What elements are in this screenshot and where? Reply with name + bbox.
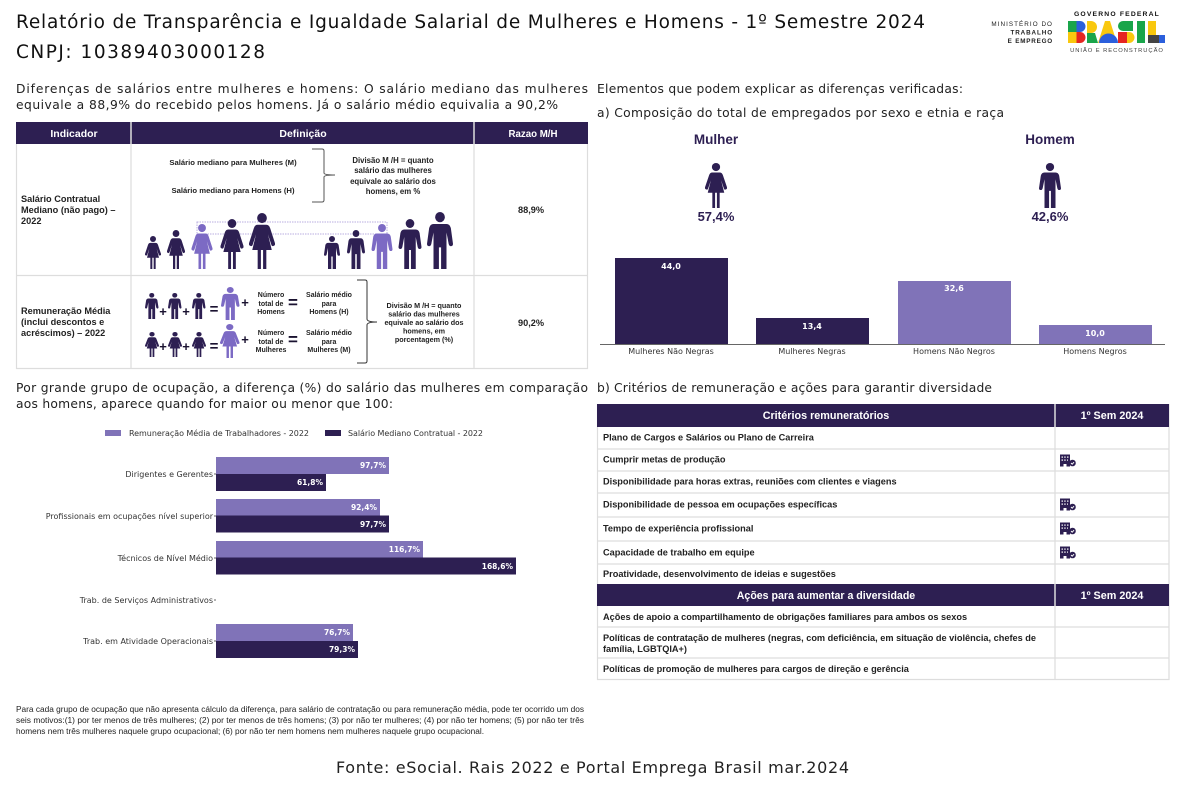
header: ações para aumentar a diversidade — [597, 584, 1169, 606]
title: CNPJ: 10389403000128 — [16, 42, 265, 63]
icons: building check — [1060, 454, 1076, 558]
row: salário contratual mediano: homens, em % — [366, 187, 420, 196]
row: remuneração média — [21, 280, 544, 363]
category labels: Trab. de Serviços Administrativos — [79, 596, 213, 605]
panel: homem: 42,6% — [1032, 209, 1069, 224]
formula: mulheres: = — [288, 330, 298, 349]
icons: people scale — [145, 212, 453, 269]
panel: critérios table — [597, 404, 1169, 680]
chart: composição bars: 32,6 — [944, 284, 964, 293]
heading: composição do total de empregados: a) Composição do total de empregados por sexo e etnia e raça — [597, 106, 1004, 120]
panel: mulher: Mulher — [694, 132, 739, 147]
text: por grande grupo de ocupação: Por grande grupo de ocupação, a diferença (%) do salário das mulheres em comparação — [16, 381, 588, 395]
row: remuneração média: homens, em — [403, 326, 445, 336]
footnote — [16, 704, 585, 736]
formula: homens: = — [210, 301, 219, 318]
category labels: Trab. em Atividade Operacionais — [82, 637, 213, 646]
value labels — [297, 461, 513, 654]
row: salário contratual mediano: salário das mulheres — [354, 166, 432, 175]
legend: Salário Mediano Contratual - 2022 — [348, 429, 483, 438]
formula: mulheres: para — [322, 339, 336, 346]
text: por grande grupo de ocupação — [16, 381, 588, 411]
panel: indicator table — [16, 122, 588, 368]
rows: ações: família, LGBTQIA+) — [603, 644, 687, 654]
legend: Remuneração Média de Trabalhadores - 2022 — [129, 428, 309, 438]
text: elementos que podem explicar: Elementos que podem explicar as diferenças verificadas: — [597, 82, 963, 96]
footnote: seis motivos:(1) por ter menos de três mulheres; (2) por ter menos de três homens; (3) por não ter mulheres; (4) por não ter homens; (5) por não ter três — [16, 715, 585, 725]
logo: governo federal brasil: GOVERNO FEDERAL — [1074, 11, 1160, 18]
rows: critérios: Tempo de experiência profissional — [603, 524, 753, 534]
source line: Fonte: eSocial. Rais 2022 e Portal Emprega Brasil mar.2024 — [336, 758, 849, 777]
rows: critérios: Cumprir metas de produção — [603, 454, 726, 464]
title — [16, 12, 925, 63]
row: remuneração média: Divisão M /H = quanto — [387, 301, 462, 310]
legend — [105, 428, 483, 438]
bars — [216, 457, 516, 658]
formula: mulheres: + — [241, 332, 249, 347]
logo: ministério do trabalho e emprego: E EMPREGO — [1008, 38, 1053, 45]
chart: composição bars: 10,0 — [1085, 329, 1105, 338]
row: salário contratual mediano: Salário mediano para Homens (H) — [171, 186, 295, 195]
row: salário contratual mediano: Salário mediano para Mulheres (M) — [169, 158, 297, 167]
formula: mulheres: Mulheres (M) — [307, 347, 351, 354]
value labels: 79,3% — [329, 645, 355, 654]
panel: homem: Homem — [1025, 132, 1075, 147]
logo: ministério do trabalho e emprego: TRABALHO — [1010, 30, 1053, 36]
formula: mulheres: Número — [258, 330, 284, 337]
row: remuneração média: salário das mulheres — [388, 310, 460, 318]
category labels: Dirigentes e Gerentes — [125, 470, 213, 479]
heading: critérios de remuneração: b) Critérios de remuneração e ações para garantir diversidade — [597, 381, 992, 395]
chart: composição bars: 44,0 — [661, 262, 681, 271]
formula: homens: total de — [259, 301, 284, 308]
header: critérios remuneratórios: Critérios remuneratórios — [763, 410, 889, 422]
text: diferenças de salários — [16, 82, 588, 112]
logo: ministério do trabalho e emprego — [991, 19, 1053, 45]
header: ações para aumentar a diversidade: Ações para aumentar a diversidade — [737, 590, 915, 602]
formula: homens: + — [241, 295, 249, 310]
formula: mulheres: Mulheres — [256, 347, 286, 354]
chart: composição bars — [600, 258, 1165, 356]
table header: Definição — [279, 128, 327, 140]
formula: homens: + — [159, 304, 167, 319]
chart: occupational groups horizontal bars — [46, 428, 516, 658]
logo: ministério do trabalho e emprego: MINISTÉRIO DO — [991, 19, 1053, 28]
header: critérios remuneratórios — [597, 404, 1169, 427]
text: diferenças de salários: equivale a 88,9% do recebido pelos homens. Já o salário médio equivalia a 90,2% — [16, 98, 558, 112]
formula: homens: Homens (H) — [309, 309, 349, 316]
value labels: 116,7% — [389, 545, 420, 554]
formula: homens — [145, 287, 352, 320]
chart: composição bars: Homens Negros — [1063, 347, 1127, 356]
row: remuneração média: (inclui descontos e — [21, 317, 104, 327]
header: ações para aumentar a diversidade: 1º Sem 2024 — [1081, 590, 1143, 602]
formula: homens: = — [288, 293, 298, 312]
table header: Indicador — [50, 128, 98, 140]
formula: mulheres — [145, 324, 352, 358]
row: remuneração média: Remuneração Média — [21, 306, 111, 316]
panel: homem — [1025, 132, 1075, 224]
rows: critérios — [603, 432, 897, 579]
formula: homens: + — [182, 304, 190, 319]
rows: critérios: Capacidade de trabalho em equipe — [603, 548, 755, 558]
row: remuneração média: equivale ao salário dos — [384, 318, 464, 327]
row: remuneração média: acréscimos) – 2022 — [21, 328, 105, 338]
footnote: homens nem três mulheres naquele grupo ocupacional; (6) por não ter nem homens nem mulheres naquele grupo ocupacional. — [16, 726, 484, 736]
header: critérios remuneratórios: 1º Sem 2024 — [1081, 410, 1143, 422]
text: diferenças de salários: Diferenças de salários entre mulheres e homens: O salário mediano das mulheres — [16, 82, 588, 96]
formula: homens: Número — [258, 292, 284, 299]
table header: Razao M/H — [508, 129, 558, 140]
row: salário contratual mediano: 88,9% — [518, 205, 544, 215]
logo: governo federal brasil — [1068, 11, 1165, 54]
chart: composição bars: Mulheres Não Negras — [628, 347, 714, 356]
formula: homens: Salário médio — [306, 292, 352, 299]
chart: composição bars: 13,4 — [802, 322, 822, 331]
chart: composição bars: Mulheres Negras — [778, 347, 846, 356]
row: remuneração média: 90,2% — [518, 318, 544, 328]
formula: mulheres: + — [159, 339, 167, 354]
row: salário contratual mediano: Mediano (não pago) – — [21, 205, 115, 215]
rows: ações: Ações de apoio a compartilhamento de obrigações familiares para ambos os sexos — [603, 612, 967, 622]
row: salário contratual mediano — [21, 149, 544, 226]
value labels: 92,4% — [351, 503, 377, 512]
footnote: Para cada grupo de ocupação que não apresenta cálculo da diferença, para salário de contratação ou para remuneração média, pode ter ocorrido um dos — [16, 704, 585, 714]
rows: ações: Políticas de contratação de mulheres (negras, com deficiência, em situação de violência, chefes de — [603, 633, 1036, 643]
row: salário contratual mediano: 2022 — [21, 216, 41, 226]
rows: critérios: Proatividade, desenvolvimento de ideias e sugestões — [603, 569, 836, 579]
rows: ações — [603, 612, 1036, 674]
text: por grande grupo de ocupação: aos homens, aparece quando for maior ou menor que 100: — [16, 397, 393, 411]
value labels: 168,6% — [482, 562, 513, 571]
category labels — [46, 470, 214, 646]
row: salário contratual mediano: Salário Contratual — [21, 194, 100, 204]
formula: mulheres: total de — [259, 339, 284, 346]
formula: mulheres: + — [182, 339, 190, 354]
row: salário contratual mediano: Divisão M /H = quanto — [352, 156, 434, 165]
rows: ações: Políticas de promoção de mulheres para cargos de direção e gerência — [603, 664, 910, 674]
row: remuneração média: porcentagem (%) — [395, 335, 454, 344]
category labels: Técnicos de Nível Médio — [117, 553, 213, 563]
value labels: 97,7% — [360, 461, 386, 470]
value labels: 61,8% — [297, 478, 323, 487]
formula: homens: para — [322, 301, 336, 308]
title: Relatório de Transparência e Igualdade Salarial de Mulheres e Homens - 1º Semestre 2024 — [16, 12, 925, 33]
panel: mulher: 57,4% — [698, 209, 735, 224]
rows: critérios: Disponibilidade para horas extras, reuniões com clientes e viagens — [603, 476, 897, 486]
logo: governo federal brasil: UNIÃO E RECONSTRUÇÃO — [1070, 47, 1164, 54]
table header — [16, 122, 588, 144]
category labels: Profissionais em ocupações nível superior — [46, 512, 214, 521]
panel: mulher — [694, 132, 739, 224]
value labels: 97,7% — [360, 520, 386, 529]
chart: composição bars: Homens Não Negros — [913, 347, 995, 356]
formula: mulheres: = — [210, 338, 219, 355]
formula: mulheres: Salário médio — [306, 330, 352, 337]
rows: critérios: Disponibilidade de pessoa em ocupações específicas — [603, 500, 837, 510]
rows: critérios: Plano de Cargos e Salários ou Plano de Carreira — [603, 432, 815, 442]
row: salário contratual mediano: equivale ao salário dos — [350, 177, 437, 186]
value labels: 76,7% — [324, 628, 350, 637]
formula: homens: Homens — [257, 309, 285, 316]
